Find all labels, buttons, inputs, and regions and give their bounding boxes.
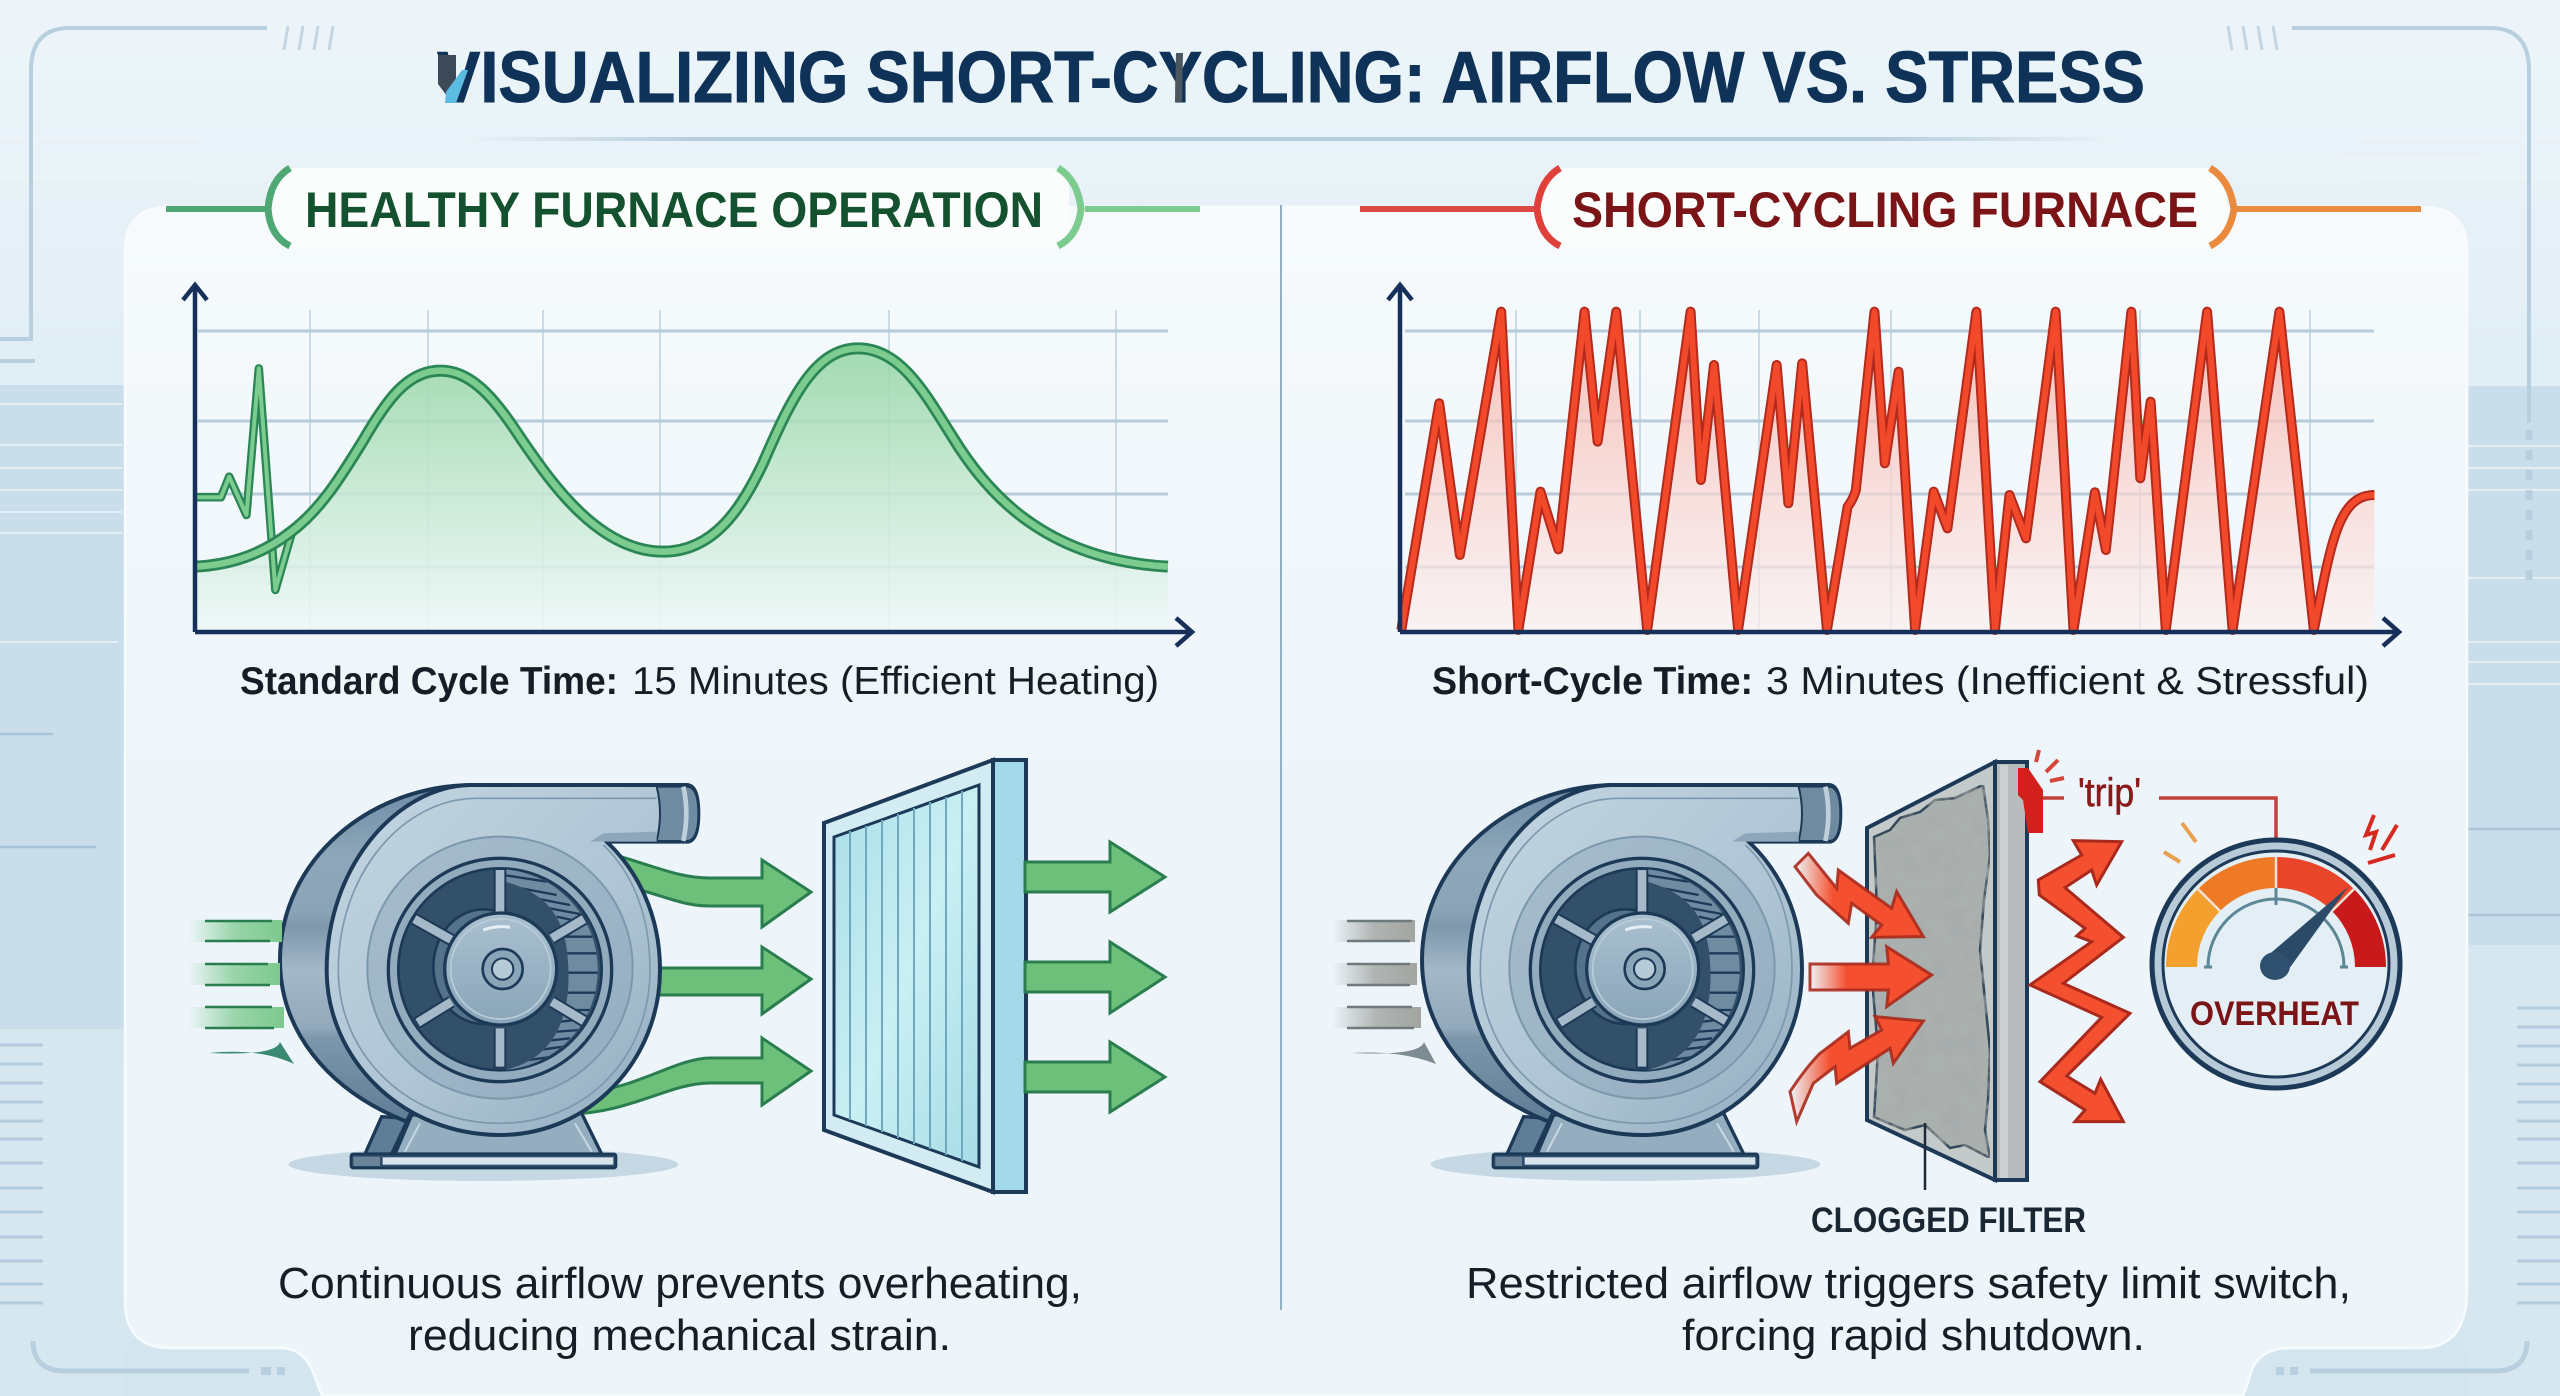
caption: standard cycle time: [240, 660, 1159, 703]
caption: short-cycle time: [1432, 660, 2369, 703]
airflow intake streaks: [188, 920, 294, 1064]
column: short-cycling furnace: [1332, 168, 2421, 1360]
chart: standard cycle: [183, 285, 1192, 646]
main panel: [125, 207, 2467, 1396]
caption: short-cycle time: 3 Minutes (Inefficient & Stressful): [1766, 660, 2369, 703]
icon: blower fan (restricted): [1422, 785, 1840, 1181]
text: short-cycling explanation: forcing rapid shutdown.: [1682, 1311, 2145, 1360]
caption: standard cycle time: Standard Cycle Time:: [240, 660, 618, 703]
panel divider: [1280, 205, 1282, 1310]
heading: healthy furnace operation: HEALTHY FURNACE OPERATION: [305, 182, 1043, 238]
heading: healthy furnace operation: [166, 168, 1200, 248]
label: clogged filter: CLOGGED FILTER: [1811, 1201, 2086, 1240]
icon: blower fan: [280, 785, 698, 1181]
arrows: fan to filter: [570, 855, 811, 1114]
icon: clean filter: [824, 760, 1026, 1192]
limit switch trip label: 'trip': [2078, 771, 2141, 815]
heading: short-cycling furnace: SHORT-CYCLING FURNACE: [1572, 182, 2198, 238]
text: healthy explanation: reducing mechanical strain.: [408, 1311, 951, 1360]
heading: short-cycling furnace: [1360, 168, 2421, 248]
text: short-cycling explanation: Restricted airflow triggers safety limit switch,: [1466, 1259, 2351, 1308]
text: healthy explanation: [278, 1259, 1082, 1360]
column: healthy furnace: [166, 168, 1200, 1360]
chart: short cycle: [1388, 285, 2399, 646]
title: VISUALIZING SHORT-CYCLING: AIRFLOW VS. STRESS: [437, 38, 2145, 118]
icon: clogged filter: [1867, 762, 2027, 1180]
icon: overheat gauge: OVERHEAT: [2190, 995, 2359, 1033]
limit switch trip label: [2018, 750, 2276, 838]
arrows: filter outflow: [1025, 842, 1165, 1112]
text: healthy explanation: Continuous airflow prevents overheating,: [278, 1259, 1082, 1308]
airflow intake streaks (weak): [1332, 920, 1436, 1064]
caption: standard cycle time: 15 Minutes (Efficient Heating): [632, 660, 1159, 703]
arrow: heat zigzag: [2030, 841, 2130, 1122]
icon: overheat gauge: [2152, 815, 2400, 1088]
text: short-cycling explanation: [1466, 1259, 2351, 1360]
arrows: blocked airflow: [1790, 853, 1932, 1122]
caption: short-cycle time: Short-Cycle Time:: [1432, 660, 1753, 703]
